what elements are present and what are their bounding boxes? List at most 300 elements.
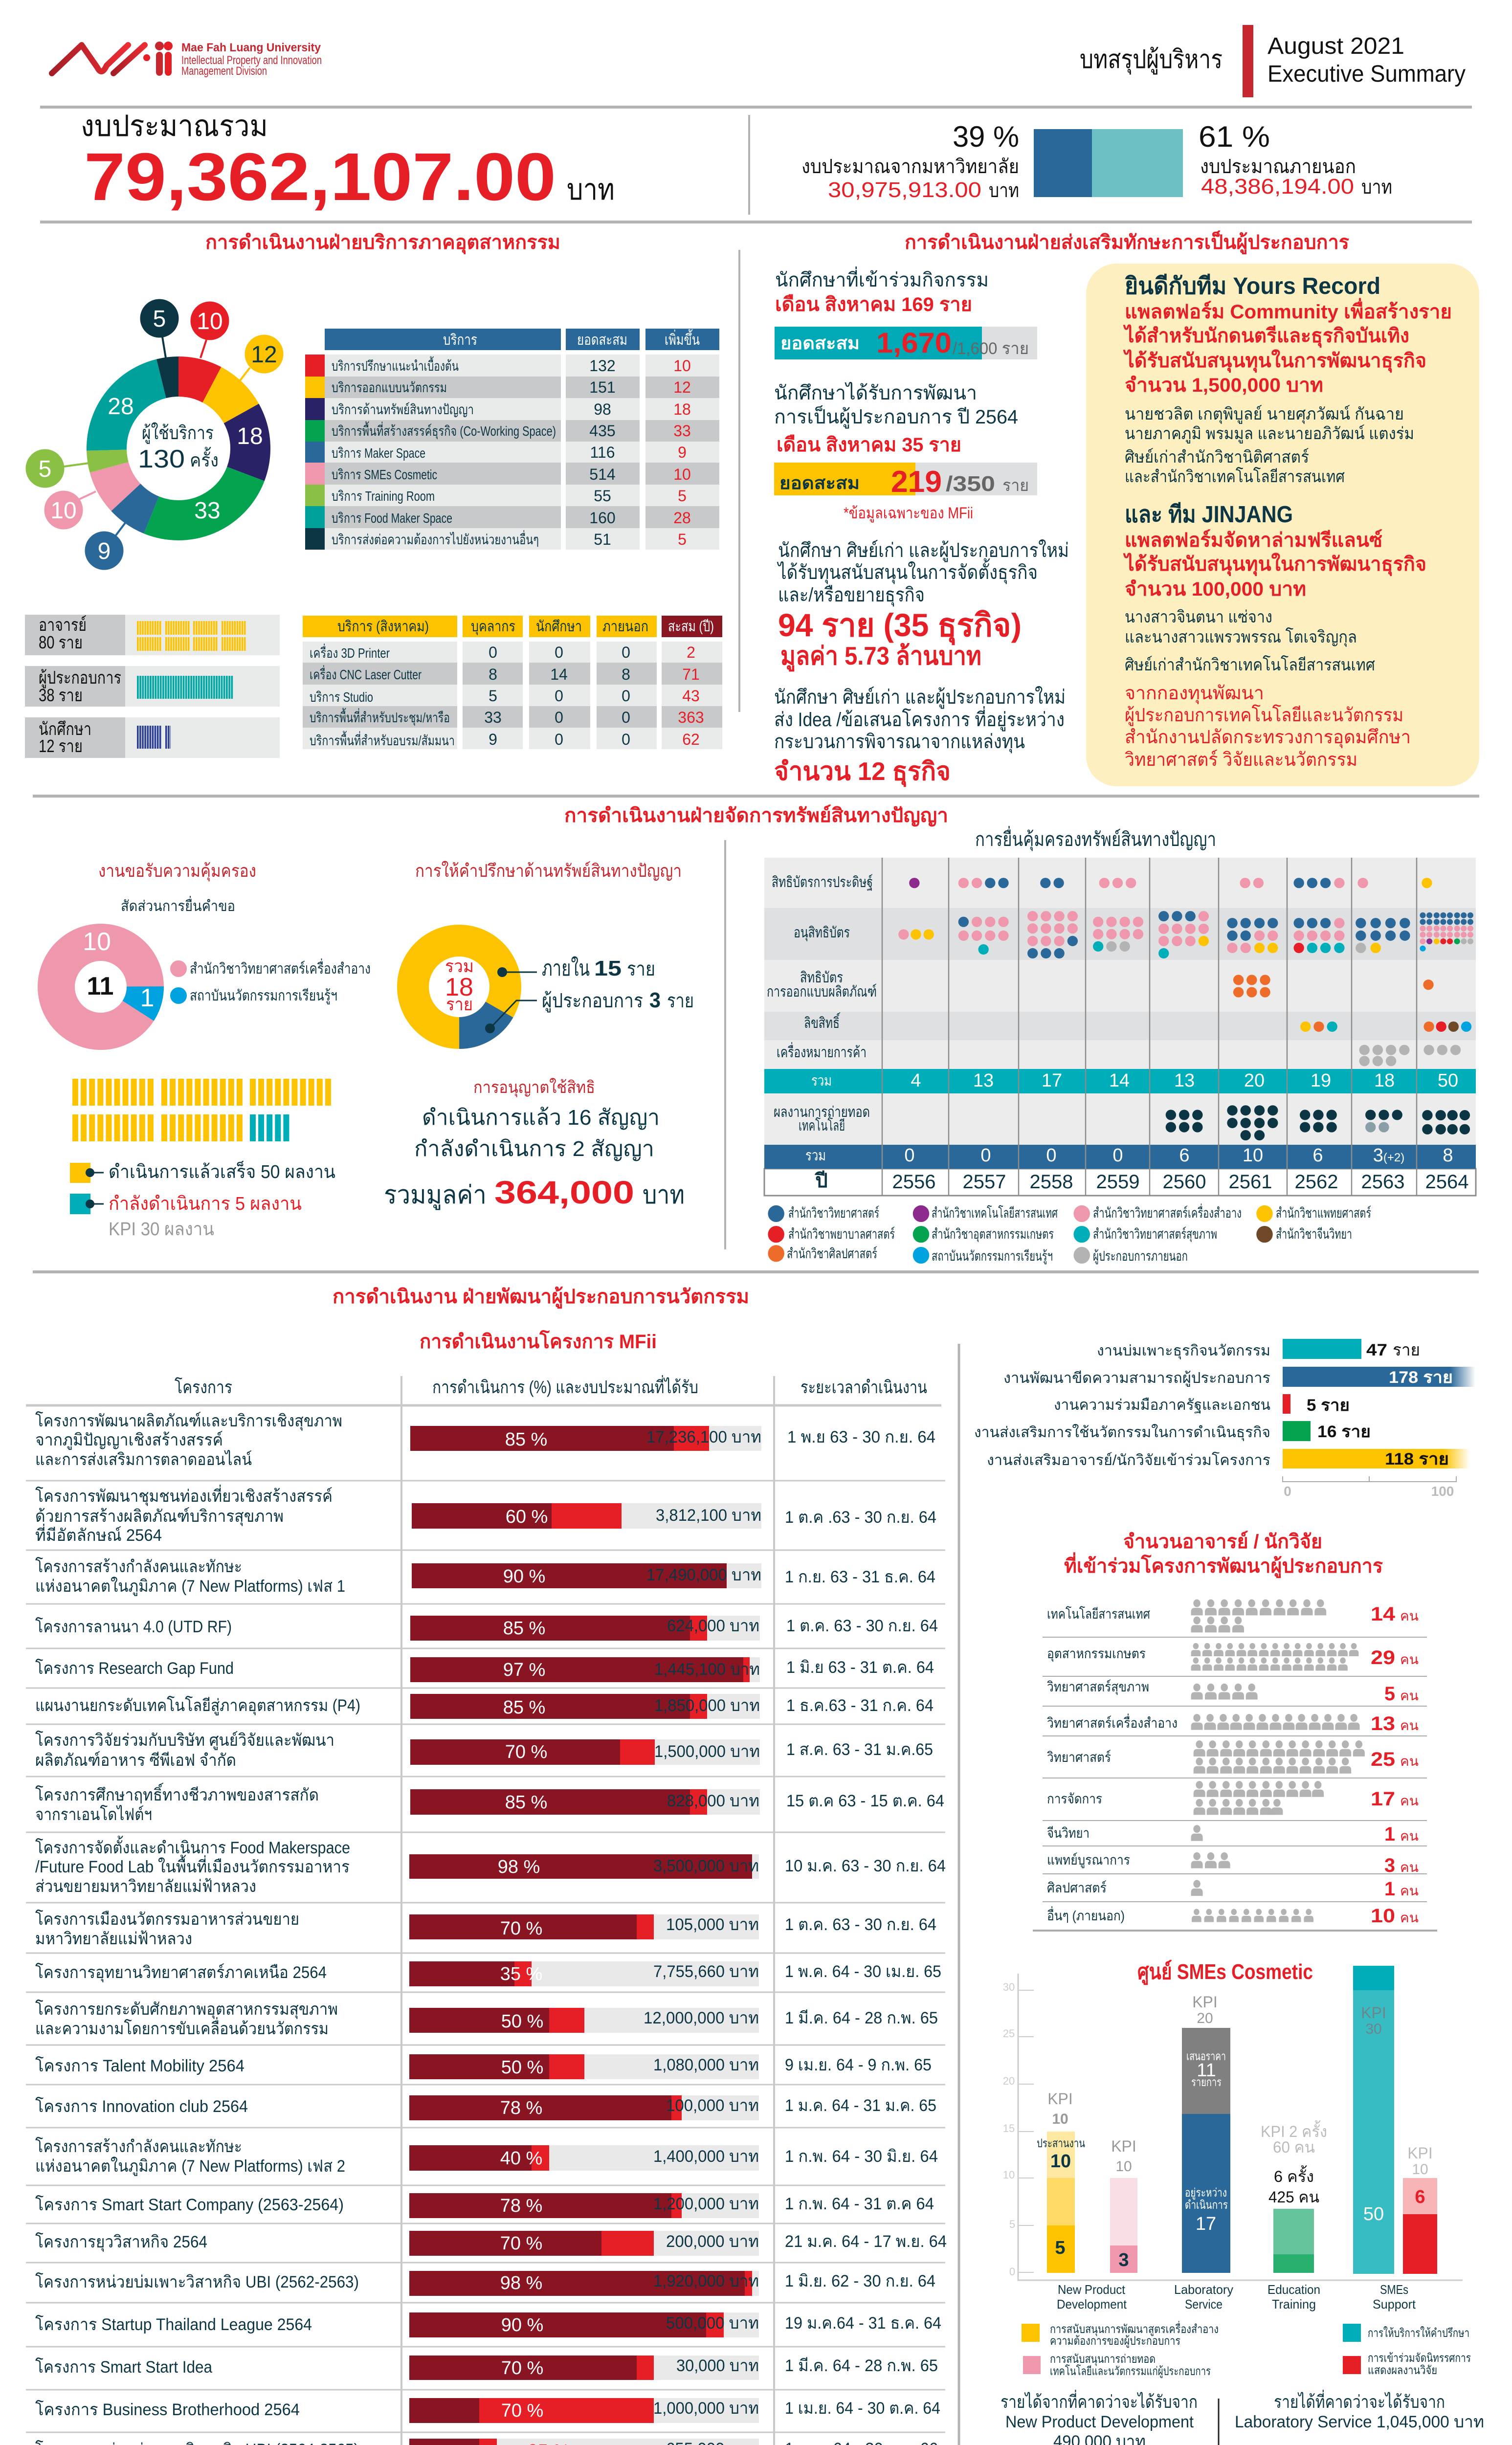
- table: equipment services: บุคลากร: [471, 619, 515, 636]
- panel: IP filings matrix: 0: [1046, 1145, 1057, 1166]
- project row 12: โครงการยกระดับศักยภาพอุตสาหกรรมสุขภาพ: [35, 2000, 338, 2019]
- project row 3: 90 %: [503, 1566, 545, 1587]
- donut: service users: 28: [108, 394, 134, 420]
- revenue summary: รายได้จากที่คาดว่าจะได้รับจาก: [1001, 2390, 1198, 2412]
- bar chart: SMEs Cosmetic center: 20: [1197, 2010, 1213, 2026]
- panel: student activity figures: กระบวนการพิจารณาจากแหล่งทุน: [774, 731, 1025, 754]
- pictogram table: researchers per school: 5: [1384, 1683, 1395, 1705]
- table: services cumulative: บริการส่งต่อความต้องการไปยังหน่วยงานอื่นๆ: [332, 530, 539, 547]
- budget split: 30,975,913.00: [828, 178, 981, 202]
- budget split: 39 %: [953, 120, 1019, 153]
- project row 11: 35 %: [500, 1964, 542, 1984]
- panel: congratulations callout: [1086, 264, 1479, 786]
- panel: protection requests: 10: [83, 928, 111, 956]
- project row 14: โครงการ Innovation club 2564: [35, 2097, 248, 2116]
- project row 17: [35, 2231, 947, 2256]
- panel: student activity figures: นักศึกษาที่เข้าร่วมกิจกรรม: [775, 267, 989, 291]
- panel: IP filings matrix: 2564: [1425, 1171, 1468, 1193]
- table: equipment services: [303, 616, 722, 749]
- project row 5: [35, 1657, 934, 1682]
- project row 21: โครงการ Business Brotherhood 2564: [35, 2400, 300, 2419]
- bar chart: development work counts: งานบ่มเพาะธุรกิจนวัตกรรม: [1097, 1343, 1270, 1360]
- table: services cumulative: 33: [673, 422, 691, 440]
- header logo: Mae Fah Luang University: [181, 41, 321, 54]
- heading: researchers: จำนวนอาจารย์ / นักวิจัย: [1123, 1531, 1322, 1553]
- project row 2: โครงการพัฒนาชุมชนท่องเที่ยวเชิงสร้างสรรค์: [35, 1485, 333, 1506]
- panel: IP filings matrix: 0: [980, 1145, 991, 1166]
- table: equipment services: เครื่อง CNC Laser Cutter: [310, 665, 422, 682]
- table: equipment services: 0: [622, 709, 630, 726]
- table: services cumulative: 514: [589, 466, 616, 483]
- table: services cumulative: บริการพื้นที่สร้างสรรค์ธุรกิจ (Co-Working Space): [332, 421, 556, 440]
- pictogram table: researchers per school: คน: [1400, 1860, 1419, 1875]
- panel: IP consulting: [396, 861, 694, 1050]
- table: equipment services: 0: [489, 644, 497, 661]
- table: equipment services: 43: [682, 687, 700, 705]
- panel: student activity figures: เดือน สิงหาคม 35 ราย: [777, 434, 961, 456]
- bar chart: SMEs Cosmetic center: 0: [1009, 2266, 1015, 2278]
- project row 8: 85 %: [505, 1792, 547, 1813]
- panel: licensing: ดำเนินการแล้ว 16 สัญญา: [422, 1106, 660, 1130]
- panel: IP filings matrix: สำนักวิชาศิลปศาสตร์: [787, 1246, 877, 1261]
- project row 19: 500,000 บาท: [666, 2314, 759, 2333]
- bar chart: SMEs Cosmetic center: 25: [1003, 2027, 1015, 2040]
- panel: IP filings matrix: สำนักวิชาวิทยาศาสตร์สุขภาพ: [1093, 1226, 1217, 1243]
- table: services cumulative: 5: [678, 531, 687, 548]
- bar chart: development work counts: [974, 1339, 1475, 1499]
- project row 9: 10 ม.ค. 63 - 30 ก.ย. 64: [785, 1857, 946, 1875]
- project row 15: [35, 2137, 938, 2176]
- table: services cumulative: 151: [589, 378, 616, 396]
- panel: IP filings matrix: 14: [1109, 1070, 1130, 1091]
- panel: licensing: รวมมูลค่า: [384, 1181, 487, 1210]
- panel: congratulations callout: นายภาคภูมิ พรมมูล และนายอภิวัฒน์ แตงร่ม: [1125, 424, 1414, 444]
- project row 3: 17,490,000 บาท: [646, 1566, 761, 1584]
- project row 7: [35, 1731, 933, 1770]
- bar chart: SMEs Cosmetic center: KPI: [1407, 2144, 1433, 2162]
- project row 6: 1,850,000 บาท: [654, 1696, 760, 1715]
- panel: student activity figures: ส่ง Idea /ข้อเสนอโครงการ ที่อยู่ระหว่าง: [774, 706, 1065, 731]
- bar chart: SMEs Cosmetic center: 15: [1003, 2122, 1015, 2134]
- bar chart: development work counts: 178 ราย: [1389, 1368, 1453, 1387]
- pictogram table: researchers per school: 25: [1371, 1749, 1395, 1770]
- donut: service users: 5: [39, 456, 51, 482]
- project row 7: 1,500,000 บาท: [654, 1742, 760, 1761]
- panel: congratulations callout: ศิษย์เก่าสำนักวิชานิติศาสตร์: [1125, 448, 1309, 467]
- panel: IP filings matrix: [764, 826, 1476, 1265]
- bar chart: SMEs Cosmetic center: SMEs: [1380, 2282, 1408, 2297]
- panel: IP filings matrix: 0: [904, 1145, 915, 1166]
- panel: IP filings matrix: 19: [1311, 1070, 1331, 1091]
- project row 19: โครงการ Startup Thailand League 2564: [35, 2315, 312, 2334]
- bar chart: SMEs Cosmetic center: 20: [1003, 2075, 1015, 2087]
- panel: IP filings matrix: 2557: [963, 1171, 1006, 1193]
- panel: IP filings matrix: 2556: [892, 1171, 935, 1193]
- bar chart: SMEs Cosmetic center: 6: [1415, 2187, 1425, 2207]
- heading: researchers: [1064, 1531, 1383, 1578]
- bar chart: development work counts: งานพัฒนาขีดความสามารถผู้ประกอบการ: [1003, 1370, 1270, 1387]
- panel: student activity figures: เดือน สิงหาคม 169 ราย: [775, 294, 972, 315]
- chart legend: SMEs Cosmetic: [1022, 2321, 1471, 2378]
- table: equipment services: เครื่อง 3D Printer: [310, 644, 390, 661]
- pictogram table: researchers per school: 1: [1384, 1878, 1395, 1900]
- table: services cumulative: บริการด้านทรัพย์สินทางปัญญา: [332, 402, 474, 417]
- budget split: 61 %: [1199, 120, 1270, 153]
- panel: IP filings matrix: 2561: [1229, 1171, 1272, 1193]
- panel: works progress tally: [70, 1092, 335, 1240]
- panel: works progress tally: ดำเนินการแล้วเสร็จ 50 ผลงาน: [109, 1160, 335, 1182]
- header title: บทสรุปผู้บริหาร: [1080, 45, 1223, 75]
- panel: protection requests: 11: [87, 972, 113, 1000]
- panel: IP filings matrix: เทคโนโลยี: [799, 1117, 845, 1134]
- panel: congratulations callout: ผู้ประกอบการเทคโนโลยีและนวัตกรรม: [1125, 704, 1403, 726]
- project row 19: [35, 2312, 941, 2337]
- project row 1: 1 พ.ย 63 - 30 ก.ย. 64: [787, 1428, 935, 1446]
- panel: licensing: [384, 1078, 685, 1210]
- project row 7: ผลิตภัณฑ์อาหาร ซีพีเอฟ จำกัด: [35, 1751, 236, 1770]
- project row 13: [35, 2054, 932, 2079]
- heading: researchers: ที่เข้าร่วมโครงการพัฒนาผู้ประกอบการ: [1064, 1552, 1383, 1578]
- pictogram table: researchers per school: คน: [1400, 1718, 1419, 1733]
- table: MFii projects: ระยะเวลาดำเนินงาน: [800, 1377, 927, 1397]
- total budget: บาท: [567, 173, 615, 206]
- bar chart: SMEs Cosmetic center: 10: [1052, 2111, 1068, 2127]
- table: equipment services: 0: [622, 644, 630, 661]
- donut: service users: 5: [153, 306, 166, 332]
- project row 22: [35, 2439, 938, 2445]
- panel: student activity figures: 94 ราย (35 ธุรกิจ): [778, 607, 1022, 645]
- table: MFii projects: [26, 1375, 949, 2445]
- budget split: งบประมาณจากมหาวิทยาลัย: [801, 156, 1019, 178]
- project row 4: โครงการลานนา 4.0 (UTD RF): [35, 1617, 232, 1636]
- project row 18: โครงการหน่วยบ่มเพาะวิสาหกิจ UBI (2562-2563): [35, 2272, 359, 2291]
- table: equipment services: 62: [682, 731, 700, 748]
- table: equipment services: 363: [678, 709, 704, 726]
- project row 3: 1 ก.ย. 63 - 31 ธ.ค. 64: [785, 1568, 935, 1586]
- pictogram table: researchers per school: คน: [1400, 1754, 1419, 1769]
- people tally: staff, entrepreneurs, students: อาจารย์: [39, 615, 87, 635]
- panel: IP filings matrix: ลิขสิทธิ์: [804, 1012, 841, 1031]
- project row 15: โครงการสร้างกำลังคนและทักษะ: [35, 2137, 242, 2156]
- panel: congratulations callout: วิทยาศาสตร์ วิจัยและนวัตกรรม: [1125, 749, 1357, 770]
- bar chart: SMEs Cosmetic center: เสนอราคา: [1186, 2050, 1226, 2063]
- panel: IP filings matrix: 3(+2): [1373, 1145, 1404, 1166]
- project row 4: 85 %: [503, 1618, 545, 1639]
- project row 13: 50 %: [501, 2057, 543, 2078]
- pictogram table: researchers per school: 1: [1384, 1823, 1395, 1845]
- bar chart: SMEs Cosmetic center: 5: [1009, 2218, 1015, 2230]
- project row 13: 9 เม.ย. 64 - 9 ก.พ. 65: [785, 2056, 932, 2074]
- pictogram table: researchers per school: ศิลปศาสตร์: [1047, 1880, 1107, 1895]
- table: services cumulative: 28: [673, 509, 691, 527]
- header title: August 2021: [1267, 33, 1404, 59]
- project row 2: 1 ต.ค .63 - 30 ก.ย. 64: [785, 1508, 936, 1527]
- bar chart: SMEs Cosmetic center: ประสานงาน: [1037, 2137, 1085, 2150]
- panel: congratulations callout: จำนวน 100,000 บาท: [1125, 578, 1306, 600]
- table: equipment services: 0: [555, 709, 563, 726]
- chart legend: SMEs Cosmetic: แสดงผลงานวิจัย: [1368, 2364, 1437, 2377]
- panel: protection requests: งานขอรับความคุ้มครอง: [98, 861, 256, 882]
- bar chart: SMEs Cosmetic center: New Product: [1058, 2282, 1126, 2297]
- panel: IP filings matrix: 4: [911, 1070, 921, 1091]
- people tally: staff, entrepreneurs, students: นักศึกษา: [39, 719, 91, 739]
- table: services cumulative: 12: [673, 378, 691, 396]
- panel: IP filings matrix: 2562: [1295, 1171, 1338, 1193]
- panel: IP filings matrix: สำนักวิชาวิทยาศาสตร์เครื่องสำอาง: [1093, 1203, 1242, 1221]
- project row 10: 105,000 บาท: [666, 1915, 759, 1934]
- donut: service users: 12: [251, 342, 277, 368]
- panel: IP consulting: ราย: [627, 958, 655, 980]
- donut: service users: 130: [138, 445, 185, 473]
- panel: IP filings matrix: 18: [1374, 1070, 1395, 1091]
- bar chart: SMEs Cosmetic center: รายการ: [1191, 2076, 1222, 2089]
- panel: IP consulting: 15: [594, 956, 622, 980]
- project row 11: 1 พ.ค. 64 - 30 เม.ย. 65: [785, 1962, 941, 1981]
- chart legend: SMEs Cosmetic: ความต้องการของผู้ประกอบการ: [1050, 2334, 1180, 2348]
- panel: student activity figures: การเป็นผู้ประกอบการ ปี 2564: [774, 405, 1018, 428]
- project row 16: [35, 2193, 934, 2218]
- project row 9: โครงการจัดตั้งและดำเนินการ Food Makerspace: [35, 1836, 350, 1857]
- project row 4: [35, 1616, 938, 1641]
- bar chart: development work counts: 47: [1366, 1341, 1387, 1359]
- bar chart: SMEs Cosmetic center: 10: [1412, 2161, 1428, 2178]
- pictogram table: researchers per school: คน: [1400, 1608, 1419, 1623]
- panel: congratulations callout: และสำนักวิชาเทคโนโลยีสารสนเทศ: [1125, 467, 1345, 486]
- panel: IP filings matrix: ปี: [815, 1170, 828, 1192]
- donut: service users: ครั้ง: [190, 446, 219, 471]
- project row 12: 12,000,000 บาท: [644, 2009, 759, 2027]
- panel: IP filings matrix: 10: [1243, 1145, 1263, 1166]
- people tally: staff, entrepreneurs, students: 80 ราย: [39, 632, 83, 652]
- bar chart: development work counts: ราย: [1393, 1341, 1420, 1359]
- table: equipment services: 71: [682, 666, 700, 683]
- bar chart: SMEs Cosmetic center: Education: [1267, 2282, 1320, 2297]
- project row 8: จากราเอนโดไฟต์ฯ: [35, 1805, 152, 1824]
- project row 3: [35, 1557, 935, 1596]
- panel: IP filings matrix: สถาบันนวัตกรรมการเรียนรู้ฯ: [932, 1248, 1053, 1265]
- pictogram table: researchers per school: คน: [1400, 1883, 1419, 1898]
- bar chart: SMEs Cosmetic center: 425 คน: [1268, 2188, 1319, 2206]
- bar chart: SMEs Cosmetic center: [1003, 1966, 1463, 2312]
- table: services cumulative: 10: [673, 357, 691, 375]
- bar chart: SMEs Cosmetic center: 10: [1115, 2158, 1132, 2175]
- bar chart: SMEs Cosmetic center: KPI 2 ครั้ง: [1261, 2120, 1327, 2140]
- header logo: [52, 41, 322, 78]
- panel: protection requests: สำนักวิชาวิทยาศาสตร์เครื่องสำอาง: [190, 958, 371, 977]
- table: services cumulative: 116: [590, 444, 615, 461]
- bar chart: SMEs Cosmetic center: KPI: [1361, 2004, 1386, 2022]
- project row 21: 70 %: [501, 2401, 543, 2421]
- panel: IP filings matrix: 2563: [1361, 1171, 1404, 1193]
- table: services cumulative: บริการ Maker Space: [332, 445, 425, 461]
- bar chart: SMEs Cosmetic center: Laboratory: [1174, 2282, 1233, 2297]
- table: equipment services: บริการพื้นที่สำหรับอบรม/สัมมนา: [310, 731, 455, 748]
- table: equipment services: สะสม (ปี): [668, 619, 714, 635]
- project row 17: 70 %: [500, 2233, 542, 2254]
- panel: IP filings matrix: 0: [1112, 1145, 1123, 1166]
- bar chart: SMEs Cosmetic center: 5: [1055, 2238, 1066, 2258]
- project row 11: โครงการอุทยานวิทยาศาสตร์ภาคเหนือ 2564: [35, 1963, 327, 1982]
- panel: student activity figures: *ข้อมูลเฉพาะของ MFii: [844, 504, 973, 523]
- table: equipment services: ภายนอก: [602, 619, 648, 635]
- panel: congratulations callout: ศิษย์เก่าสำนักวิชาเทคโนโลยีสารสนเทศ: [1125, 655, 1375, 674]
- bar chart: SMEs Cosmetic center: อยู่ระหว่าง: [1185, 2186, 1227, 2200]
- bar chart: SMEs Cosmetic center: ดำเนินการ: [1185, 2199, 1228, 2212]
- project row 12: [35, 2000, 938, 2038]
- table: equipment services: บริการพื้นที่สำหรับประชุม/หารือ: [310, 708, 450, 726]
- project row 6: [35, 1694, 934, 1719]
- project row 5: 97 %: [503, 1660, 545, 1680]
- project row 10: 70 %: [500, 1918, 542, 1939]
- panel: congratulations callout: ยินดีกับทีม Yours Record: [1125, 273, 1380, 299]
- panel: protection requests: 1: [140, 984, 154, 1012]
- panel: student activity figures: [774, 267, 1069, 787]
- project row 7: 1 ส.ค. 63 - 31 ม.ค.65: [786, 1740, 933, 1759]
- project row 17: 200,000 บาท: [666, 2232, 759, 2251]
- project row 16: 78 %: [500, 2196, 542, 2216]
- table: services cumulative: บริการปรึกษาแนะนำเบื้องต้น: [332, 356, 459, 374]
- table: services cumulative: 5: [678, 487, 687, 505]
- project row 7: โครงการวิจัยร่วมกับบริษัท ศูนย์วิจัยและพัฒนา: [35, 1731, 334, 1750]
- panel: IP filings matrix: 20: [1244, 1070, 1265, 1091]
- pictogram table: researchers per school: เทคโนโลยีสารสนเทศ: [1047, 1606, 1150, 1622]
- project row 14: 1 ม.ค. 64 - 31 ม.ค. 65: [785, 2096, 936, 2115]
- pictogram table: researchers per school: 13: [1371, 1713, 1395, 1734]
- project row 16: 1,200,000 บาท: [653, 2195, 759, 2213]
- panel: IP filings matrix: 2558: [1030, 1171, 1073, 1193]
- project row 21: 1,000,000 บาท: [653, 2399, 759, 2418]
- panel: IP filings matrix: 13: [973, 1070, 994, 1091]
- pictogram table: researchers per school: คน: [1400, 1793, 1419, 1808]
- panel: IP filings matrix: สำนักวิชาพยาบาลศาสตร์: [788, 1226, 895, 1242]
- project row 8: 15 ต.ค 63 - 15 ต.ค. 64: [786, 1792, 944, 1810]
- project row 10: โครงการเมืองนวัตกรรมอาหารส่วนขยาย: [35, 1910, 299, 1929]
- pictogram table: researchers per school: 14: [1371, 1603, 1396, 1625]
- panel: IP filings matrix: สำนักวิชาจีนวิทยา: [1276, 1226, 1352, 1242]
- table: equipment services: 8: [622, 666, 630, 683]
- project row 20: [35, 2356, 938, 2380]
- panel: licensing: บาท: [643, 1181, 685, 1209]
- panel: congratulations callout: แพลตฟอร์ม Community เพื่อสร้างราย: [1125, 298, 1452, 323]
- table: services cumulative: 55: [594, 487, 611, 505]
- table: services cumulative: 51: [594, 531, 611, 548]
- project row 11: [35, 1961, 941, 1986]
- project row 1: 17,236,100 บาท: [646, 1428, 761, 1446]
- project row 12: และความงามโดยการขับเคลื่อนด้วยนวัตกรรม: [35, 2017, 329, 2038]
- budget split: 48,386,194.00: [1201, 175, 1354, 199]
- panel: works progress tally: กำลังดำเนินการ 5 ผลงาน: [109, 1194, 302, 1214]
- pictogram table: researchers per school: การจัดการ: [1047, 1791, 1102, 1806]
- table: services cumulative: บริการออกแบบนวัตกรรม: [332, 380, 447, 395]
- panel: student activity figures: ได้รับทุนสนับสนุนในการจัดตั้งธุรกิจ: [777, 558, 1038, 584]
- project row 14: 78 %: [500, 2098, 542, 2118]
- heading: SMEs Cosmetic: ศูนย์ SMEs Cosmetic: [1137, 1959, 1313, 1985]
- project row 15: แห่งอนาคตในภูมิภาค (7 New Platforms) เฟส 2: [35, 2156, 345, 2176]
- people tally: staff, entrepreneurs, students: [25, 615, 280, 758]
- header title: Executive Summary: [1267, 61, 1466, 87]
- panel: congratulations callout: แพลตฟอร์มจัดหาล่ามฟรีแลนซ์: [1125, 529, 1382, 551]
- project row 1: และการส่งเสริมการตลาดออนไลน์: [35, 1450, 252, 1469]
- bar chart: development work counts: 118 ราย: [1385, 1450, 1449, 1468]
- project row 21: [35, 2398, 940, 2423]
- budget split: งบประมาณภายนอก: [1200, 156, 1356, 178]
- project row 4: 1 ต.ค. 63 - 30 ก.ย. 64: [786, 1617, 938, 1635]
- table: services cumulative: 98: [594, 400, 611, 418]
- table: equipment services: 2: [687, 644, 695, 661]
- project row 17: โครงการยุววิสาหกิจ 2564: [35, 2232, 207, 2252]
- project row 20: 1 มี.ค. 64 - 28 ก.พ. 65: [785, 2356, 938, 2375]
- project row 18: 1 มิ.ย. 62 - 30 ก.ย. 64: [785, 2272, 935, 2290]
- chart legend: SMEs Cosmetic: การให้บริการให้คำปรึกษา: [1368, 2326, 1469, 2340]
- table: equipment services: 0: [555, 731, 563, 748]
- panel: congratulations callout: จำนวน 1,500,000 บาท: [1125, 375, 1323, 396]
- table: services cumulative: 18: [673, 400, 691, 418]
- project row 20: 30,000 บาท: [676, 2356, 759, 2375]
- total budget: [81, 110, 615, 215]
- bar chart: development work counts: งานส่งเสริมการใช้นวัตกรรมในการดำเนินธุรกิจ: [974, 1424, 1270, 1442]
- project row 1: [35, 1411, 935, 1469]
- table: equipment services: นักศึกษา: [536, 619, 582, 635]
- panel: IP consulting: ราย: [446, 994, 473, 1014]
- panel: IP filings matrix: 6: [1312, 1145, 1323, 1166]
- table: equipment services: 0: [622, 687, 630, 705]
- pictogram table: researchers per school: คน: [1400, 1828, 1419, 1844]
- panel: student activity figures: มูลค่า 5.73 ล้านบาท: [780, 642, 981, 672]
- panel: IP consulting: รวม: [445, 956, 474, 976]
- panel: IP filings matrix: การยื่นคุ้มครองทรัพย์สินทางปัญญา: [975, 826, 1216, 851]
- project row 7: 70 %: [505, 1742, 547, 1762]
- bar chart: development work counts: 5 ราย: [1307, 1396, 1350, 1415]
- panel: congratulations callout: และ ทีม JINJANG: [1125, 502, 1293, 528]
- pictogram table: researchers per school: จีนวิทยา: [1047, 1825, 1090, 1841]
- project row 15: 1,400,000 บาท: [653, 2147, 759, 2166]
- panel: IP filings matrix: 17: [1042, 1070, 1062, 1091]
- revenue summary: Laboratory Service 1,045,000 บาท: [1235, 2413, 1484, 2431]
- panel: IP filings matrix: รวม: [811, 1073, 832, 1089]
- table: equipment services: 14: [550, 666, 568, 683]
- total budget: 79,362,107.00: [84, 139, 556, 215]
- panel: IP filings matrix: สำนักวิชาเทคโนโลยีสารสนเทศ: [932, 1205, 1058, 1221]
- panel: congratulations callout: จากกองทุนพัฒนา: [1125, 683, 1264, 704]
- panel: works progress tally: KPI 30 ผลงาน: [109, 1219, 214, 1240]
- pictogram table: researchers per school: คน: [1400, 1688, 1419, 1703]
- project row 2: ที่มีอัตลักษณ์ 2564: [35, 1524, 162, 1545]
- table: MFii projects: การดำเนินการ (%) และงบประมาณที่ได้รับ: [432, 1375, 698, 1397]
- pictogram table: researchers per school: วิทยาศาสตร์เครื่องสำอาง: [1047, 1713, 1178, 1731]
- panel: student activity figures: และ/หรือขยายธุรกิจ: [778, 584, 925, 607]
- donut: service users: 18: [237, 423, 263, 449]
- panel: IP filings matrix: สำนักวิชาแพทยศาสตร์: [1276, 1205, 1371, 1221]
- panel: congratulations callout: ได้รับสนับสนุนทุนในการพัฒนาธุรกิจ: [1123, 553, 1426, 577]
- project row 2: ด้วยการสร้างผลิตภัณฑ์บริการสุขภาพ: [35, 1507, 284, 1526]
- panel: congratulations callout: และนางสาวแพรวพรรณ โตเจริญกุล: [1125, 627, 1357, 647]
- project row 18: 1,920,000 บาท: [653, 2272, 759, 2290]
- chart legend: SMEs Cosmetic: เทคโนโลยีและนวัตกรรมแก่ผู้ประกอบการ: [1050, 2364, 1211, 2378]
- project row 8: 828,000 บาท: [667, 1792, 759, 1810]
- panel: IP filings matrix: อนุสิทธิบัตร: [794, 925, 850, 942]
- project row 9: 98 %: [498, 1857, 540, 1877]
- project row 17: 21 ม.ค. 64 - 17 พ.ย. 64: [785, 2232, 947, 2251]
- project row 15: 1 ก.พ. 64 - 30 มิ.ย. 64: [785, 2147, 938, 2166]
- donut: service users: [25, 299, 284, 570]
- table: equipment services: 5: [489, 687, 497, 705]
- bar chart: SMEs Cosmetic center: Development: [1057, 2297, 1127, 2312]
- panel: IP filings matrix: การออกแบบผลิตภัณฑ์: [767, 983, 877, 1000]
- bar chart: SMEs Cosmetic center: 11: [1197, 2060, 1216, 2081]
- project row 6: แผนงานยกระดับเทคโนโลยีสู่ภาคอุตสาหกรรม (P4): [35, 1696, 360, 1715]
- donut: service users: 9: [98, 538, 111, 564]
- panel: IP filings matrix: เครื่องหมายการค้า: [777, 1042, 867, 1061]
